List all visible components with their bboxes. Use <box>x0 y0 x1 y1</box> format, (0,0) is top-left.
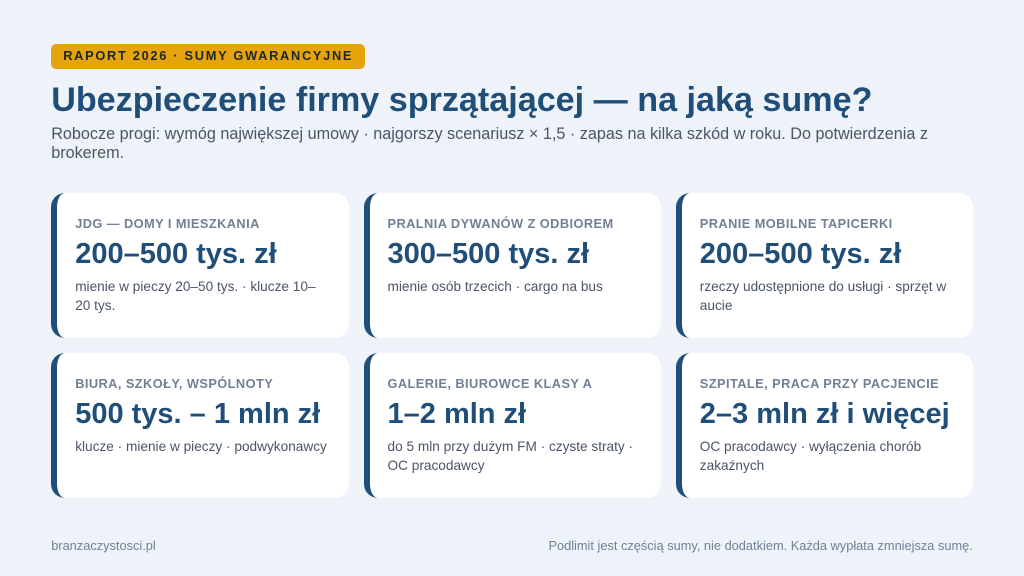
panel: galerie, biurowce <box>364 353 661 498</box>
card description: klucze · mienie w pieczy · podwykonawcy <box>75 439 327 454</box>
card amount: 1–2 mln zł <box>388 398 526 430</box>
card description: mienie w pieczy 20–50 tys. · klucze 10–20 tys. <box>75 279 316 313</box>
card label: SZPITALE, PRACA PRZY PACJENCIE <box>700 376 939 391</box>
subtitle: Robocze progi: wymóg największej umowy · najgorszy scenariusz × 1,5 · zapas na kilka szkód w roku. Do potwierdzenia z brokerem. <box>51 125 928 162</box>
card amount: 2–3 mln zł i więcej <box>700 398 950 430</box>
card label: GALERIE, BIUROWCE KLASY A <box>388 376 592 391</box>
card label: BIURA, SZKOŁY, WSPÓLNOTY <box>75 376 273 391</box>
card amount: 200–500 tys. zł <box>75 238 277 270</box>
card description: mienie osób trzecich · cargo na bus <box>388 279 603 294</box>
badge: report label: RAPORT 2026 · SUMY GWARANCYJNE <box>63 48 353 63</box>
card label: PRALNIA DYWANÓW Z ODBIOREM <box>388 216 614 231</box>
panel: pralnia dywanów <box>364 193 661 338</box>
card amount: 500 tys. – 1 mln zł <box>75 398 320 430</box>
footer: source: branzaczystosci.pl <box>51 538 156 553</box>
card amount: 200–500 tys. zł <box>700 238 901 270</box>
card description: OC pracodawcy · wyłączenia chorób zakaźnych <box>700 439 921 473</box>
panel: JDG domy i mieszkania <box>51 193 349 338</box>
card label: JDG — DOMY I MIESZKANIA <box>75 216 260 231</box>
footer: note: Podlimit jest częścią sumy, nie dodatkiem. Każda wypłata zmniejsza sumę. <box>548 538 973 553</box>
panel: szpitale <box>676 353 973 498</box>
panel: pranie mobilne tapicerki <box>676 193 973 338</box>
card description: do 5 mln przy dużym FM · czyste straty · OC pracodawcy <box>388 439 633 473</box>
badge: report label <box>51 44 365 69</box>
card label: PRANIE MOBILNE TAPICERKI <box>700 216 893 231</box>
title: Ubezpieczenie firmy sprzątającej — na jaką sumę? <box>51 81 872 119</box>
card description: rzeczy udostępnione do usługi · sprzęt w aucie <box>700 279 946 313</box>
card amount: 300–500 tys. zł <box>388 238 589 270</box>
panel: biura, szkoły, wspólnoty <box>51 353 349 498</box>
